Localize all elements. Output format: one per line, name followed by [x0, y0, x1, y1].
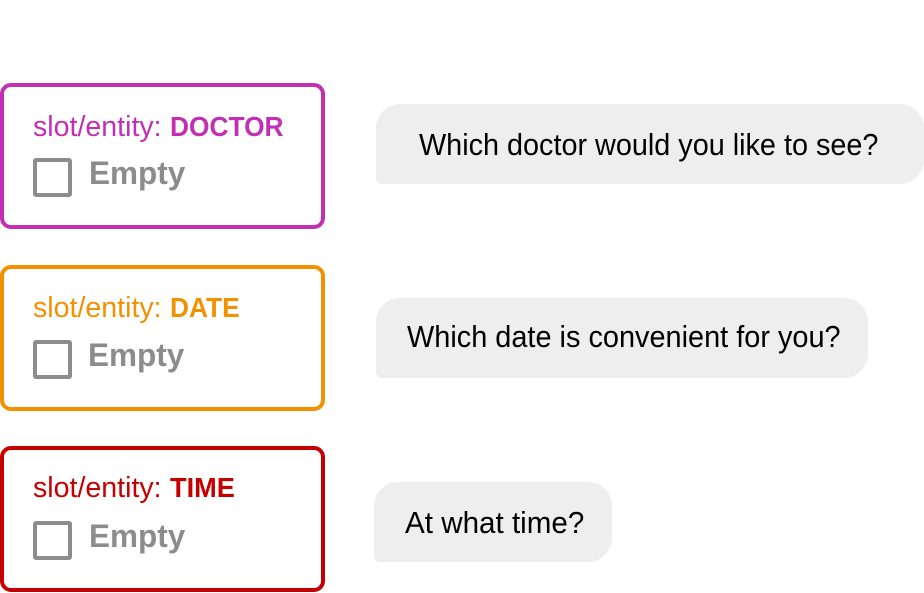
chat bubble: doctor question	[376, 104, 924, 184]
chat bubble: date question: Which date is convenient for you?	[407, 319, 841, 354]
status text: Empty	[88, 337, 184, 373]
panel: doctor slot	[0, 83, 325, 229]
chat bubble: doctor question: Which doctor would you like to see?	[419, 127, 878, 162]
panel: date slot	[0, 265, 325, 411]
slot label: date: DATE	[170, 292, 240, 323]
slot label: time	[33, 472, 235, 504]
icon: empty checkbox	[33, 340, 72, 379]
slot label: time: TIME	[170, 472, 235, 503]
slot label: date	[33, 292, 240, 324]
chat bubble: time question	[374, 482, 612, 562]
status text: Empty	[89, 518, 185, 554]
chat bubble: date question	[376, 298, 868, 378]
chat bubble: time question: At what time?	[405, 505, 584, 540]
icon: empty checkbox	[33, 158, 72, 197]
slot label: doctor: slot/entity:	[33, 111, 162, 143]
slot label: time: slot/entity:	[33, 472, 162, 504]
icon: empty checkbox	[33, 521, 72, 560]
slot label: date: slot/entity:	[33, 292, 162, 324]
panel: time slot	[0, 446, 325, 592]
status text: Empty	[89, 155, 185, 191]
slot label: doctor	[33, 111, 284, 143]
slot label: doctor: DOCTOR	[170, 111, 284, 142]
